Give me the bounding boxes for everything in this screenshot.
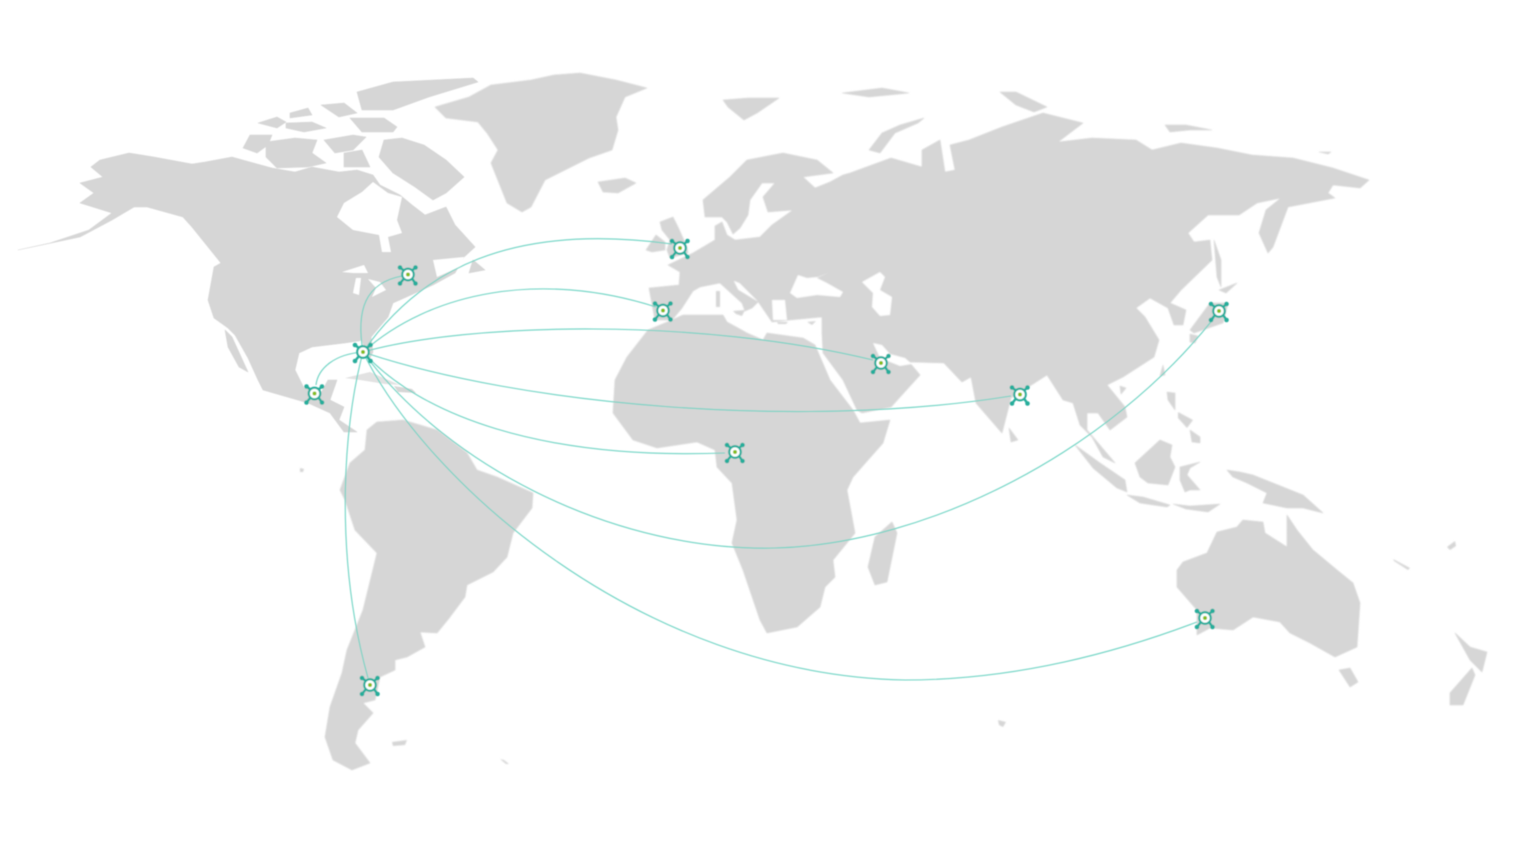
arc to Spain <box>363 289 656 352</box>
marker: hub <box>353 343 373 363</box>
Eurasia <box>646 88 1369 463</box>
arc to United Kingdom <box>363 239 672 352</box>
South Georgia <box>500 759 509 764</box>
connection arcs <box>316 239 1214 680</box>
Arctic islands of Eurasia <box>723 88 1331 154</box>
Galapagos <box>300 468 304 472</box>
Aegean Sea <box>772 300 787 320</box>
Florida <box>362 337 373 358</box>
South America <box>300 420 533 770</box>
marker: Gulf <box>871 354 891 374</box>
arc to Gulf <box>363 329 873 360</box>
arc to Japan <box>363 318 1214 548</box>
marker: Spain <box>653 301 673 322</box>
arc to Australia <box>363 352 1197 680</box>
land masses <box>18 73 1487 770</box>
marker: United Kingdom <box>670 239 690 259</box>
Taiwan, Hainan and Sri Lanka <box>1009 365 1165 442</box>
Baja California <box>225 330 248 372</box>
marker: Canada <box>398 265 418 286</box>
arc to Mexico <box>316 352 363 385</box>
Greenland <box>435 73 647 212</box>
marker: Japan <box>1209 302 1229 322</box>
arc to India <box>363 352 1011 412</box>
Africa <box>613 315 890 633</box>
Mediterranean islands <box>716 291 816 325</box>
marker: Central Africa <box>725 443 745 463</box>
marker: Mexico <box>304 384 324 405</box>
Newfoundland <box>469 260 485 273</box>
marker: Australia <box>1195 609 1215 629</box>
marker: India <box>1010 385 1030 406</box>
Pacific and southern islands <box>998 541 1456 727</box>
Arctic archipelago <box>243 78 478 200</box>
Australia <box>1177 515 1360 657</box>
location markers <box>304 239 1229 696</box>
North America <box>18 78 485 432</box>
Gulf of St Lawrence <box>433 257 464 277</box>
Caribbean islands <box>345 372 416 393</box>
Madagascar <box>868 522 897 585</box>
marker: Chile <box>360 676 380 696</box>
Great Lakes <box>342 265 368 273</box>
British Isles <box>646 217 688 258</box>
arc to Chile <box>345 352 368 678</box>
arc to Canada <box>361 276 402 352</box>
Hudson Bay <box>337 182 402 252</box>
Iceland <box>598 178 636 193</box>
New Zealand <box>1450 633 1487 705</box>
Black Sea <box>790 272 843 298</box>
Southeast Asia islands <box>1075 392 1323 513</box>
arc to Central Africa <box>363 352 725 454</box>
Japan and Sakhalin <box>1190 240 1237 343</box>
Caspian Sea <box>862 272 892 316</box>
Persian Gulf <box>873 343 912 366</box>
Tasmania <box>1339 668 1358 687</box>
Falkland Islands <box>392 740 407 746</box>
